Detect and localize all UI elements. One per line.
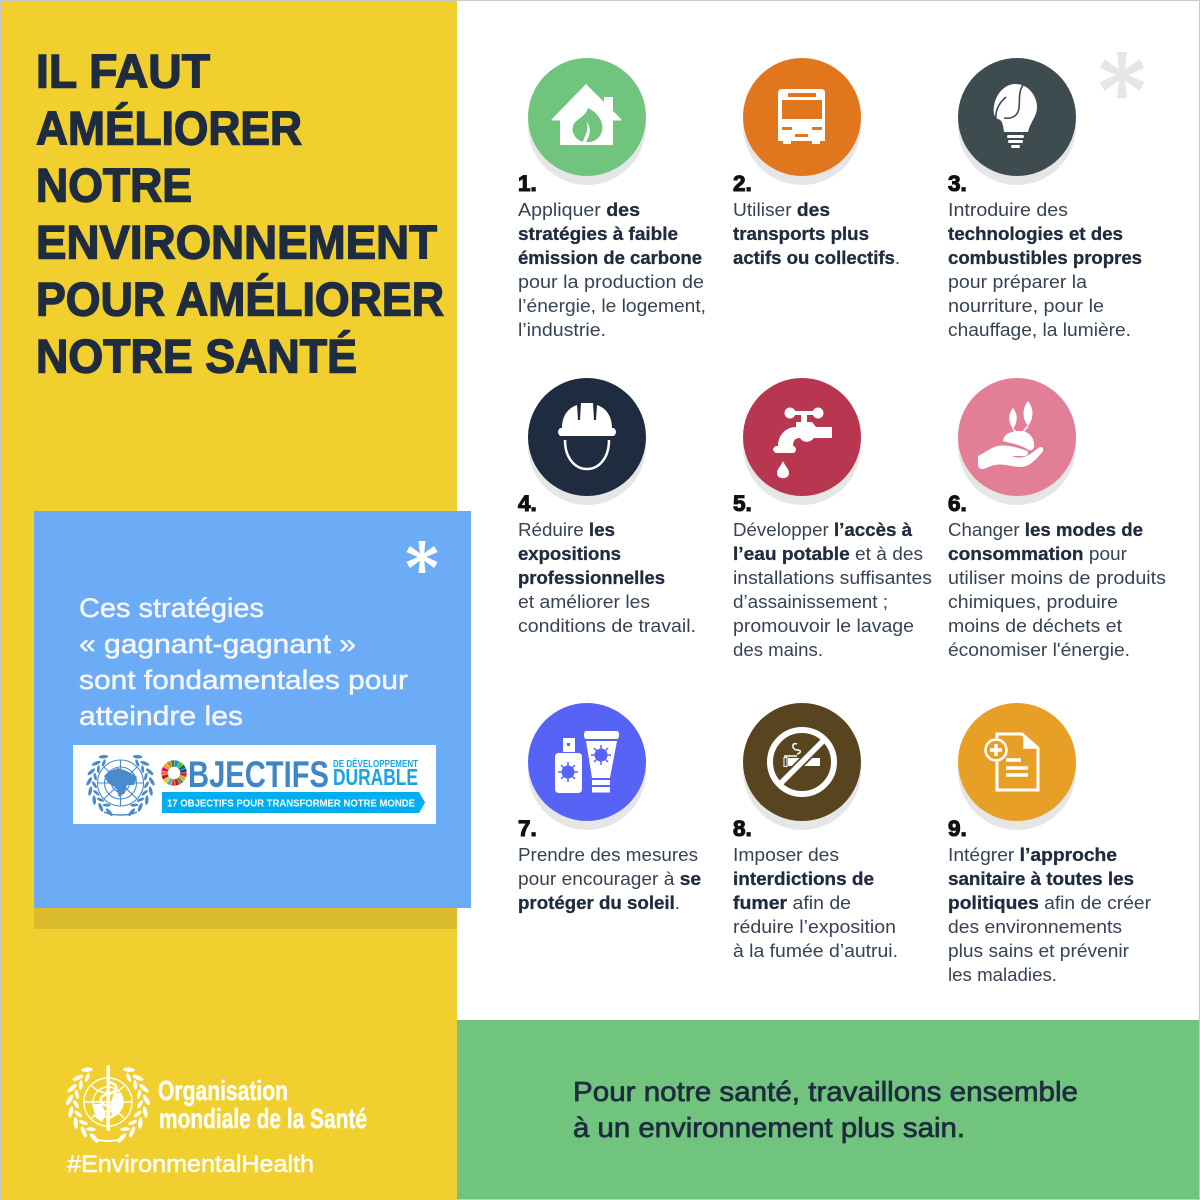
WHO wordmark bbox=[158, 1075, 367, 1134]
item 3 bbox=[948, 58, 1142, 340]
text: item 6: utiliser moins de produits bbox=[948, 567, 1166, 588]
icon: water tap bbox=[743, 378, 861, 505]
logo: sustainable development goals banner bbox=[73, 745, 436, 824]
text: item 4: expositions bbox=[518, 543, 621, 564]
text: item 3 bbox=[948, 199, 1142, 340]
title: AMÉLIORER bbox=[36, 102, 302, 154]
text: item 9: des environnements bbox=[948, 916, 1122, 937]
text: item 1: pour la production de bbox=[518, 271, 704, 292]
callout text bbox=[79, 593, 408, 731]
icon: bus bbox=[743, 58, 861, 185]
text: item 7: Prendre des mesures bbox=[518, 844, 698, 865]
logo wordmark: DURABLE bbox=[333, 764, 418, 790]
icon: SDG colour wheel bbox=[164, 764, 184, 782]
text: item 9: les maladies. bbox=[948, 964, 1057, 985]
item 3: 3. bbox=[948, 171, 967, 196]
text: item 5: Développer l’accès à bbox=[733, 519, 913, 540]
item 9: 9. bbox=[948, 816, 967, 841]
text: item 5: d’assainissement ; bbox=[733, 591, 888, 612]
text: item 6: consommation pour bbox=[948, 543, 1127, 564]
text: item 5 bbox=[733, 519, 932, 660]
text: item 6: chimiques, produire bbox=[948, 591, 1118, 612]
text: item 2: transports plus bbox=[733, 223, 869, 244]
title: IL FAUT bbox=[36, 44, 210, 98]
text: item 1: l’industrie. bbox=[518, 319, 606, 340]
text: item 1: l’énergie, le logement, bbox=[518, 295, 706, 316]
text: item 6: moins de déchets et bbox=[948, 615, 1122, 636]
text: item 2: Utiliser des bbox=[733, 199, 830, 220]
callout text: « gagnant-gagnant » bbox=[79, 629, 356, 659]
logo wordmark: BJECTIFS bbox=[188, 754, 329, 795]
text: item 9 bbox=[948, 844, 1151, 985]
text: item 8: interdictions de bbox=[733, 868, 874, 889]
text: item 4: et améliorer les bbox=[518, 591, 650, 612]
text: item 6: économiser l'énergie. bbox=[948, 639, 1130, 660]
icon: white asterisk bbox=[406, 541, 438, 573]
text: item 9: sanitaire à toutes les bbox=[948, 868, 1134, 889]
text: item 1 bbox=[518, 199, 706, 340]
text: item 5: des mains. bbox=[733, 639, 823, 660]
text: item 9: politiques afin de créer bbox=[948, 892, 1151, 913]
icon: hand holding sprout bbox=[958, 378, 1076, 505]
text: item 1: stratégies à faible bbox=[518, 223, 678, 244]
text: item 5: l’eau potable et à des bbox=[733, 543, 923, 564]
callout text: atteindre les bbox=[79, 701, 243, 731]
title: ENVIRONNEMENT bbox=[36, 216, 437, 268]
footer message bbox=[573, 1076, 1078, 1143]
title: NOTRE bbox=[36, 158, 192, 212]
item 9 bbox=[948, 703, 1151, 985]
hashtag: #EnvironmentalHealth bbox=[67, 1151, 314, 1178]
item 5 bbox=[733, 378, 932, 660]
WHO wordmark: mondiale de la Santé bbox=[159, 1103, 367, 1134]
callout text: sont fondamentales pour bbox=[79, 665, 408, 695]
WHO wordmark: Organisation bbox=[158, 1075, 288, 1106]
icon: grey asterisk bbox=[1100, 52, 1144, 98]
text: item 1: émission de carbone bbox=[518, 247, 702, 268]
callout text: Ces stratégies bbox=[79, 593, 264, 623]
text: item 6 bbox=[948, 519, 1166, 660]
item 6 bbox=[948, 378, 1166, 660]
logo wordmark: DE DÉVELOPPEMENT bbox=[333, 757, 418, 770]
text: item 5: installations suffisantes bbox=[733, 567, 932, 588]
text: item 7 bbox=[518, 844, 701, 913]
text: item 8: à la fumée d’autrui. bbox=[733, 940, 898, 961]
text: item 2: actifs ou collectifs. bbox=[733, 247, 900, 268]
text: item 8: réduire l’exposition bbox=[733, 916, 896, 937]
item 4 bbox=[518, 378, 696, 636]
text: item 3: technologies et des bbox=[948, 223, 1123, 244]
icon: sunscreen bottles bbox=[528, 703, 646, 830]
item 7 bbox=[518, 703, 701, 913]
icon: leaf light bulb bbox=[958, 58, 1076, 185]
item 1 bbox=[518, 58, 706, 340]
text: item 3: chauffage, la lumière. bbox=[948, 319, 1131, 340]
text: item 3: combustibles propres bbox=[948, 247, 1142, 268]
text: item 9: plus sains et prévenir bbox=[948, 940, 1129, 961]
panel: yellow left column bbox=[0, 0, 457, 1200]
item 1: 1. bbox=[518, 171, 537, 196]
title bbox=[36, 44, 444, 382]
icon: medical document bbox=[958, 703, 1076, 830]
item 2 bbox=[733, 58, 900, 268]
item 8: 8. bbox=[733, 816, 752, 841]
logo ribbon: 17 OBJECTIFS POUR TRANSFORMER NOTRE MONDE bbox=[167, 798, 415, 810]
text: item 8: fumer afin de bbox=[733, 892, 851, 913]
logo: WHO emblem bbox=[65, 1065, 151, 1144]
text: item 4: Réduire les bbox=[518, 519, 615, 540]
text: item 8 bbox=[733, 844, 898, 961]
icon: UN emblem bbox=[85, 755, 156, 817]
item 4: 4. bbox=[518, 491, 537, 516]
text: item 3: pour préparer la bbox=[948, 271, 1088, 292]
item 8 bbox=[733, 703, 898, 961]
footer message: Pour notre santé, travaillons ensemble bbox=[573, 1076, 1078, 1107]
footer message: à un environnement plus sain. bbox=[573, 1112, 965, 1143]
text: item 6: Changer les modes de bbox=[948, 519, 1143, 540]
text: item 5: promouvoir le lavage bbox=[733, 615, 914, 636]
icon: house with leaf bbox=[528, 58, 646, 185]
text: item 4: professionnelles bbox=[518, 567, 665, 588]
text: item 2 bbox=[733, 199, 900, 268]
icon: no smoking bbox=[743, 703, 861, 830]
text: item 3: Introduire des bbox=[948, 199, 1068, 220]
panel: blue callout bbox=[34, 511, 471, 929]
item 5: 5. bbox=[733, 491, 752, 516]
text: item 4: conditions de travail. bbox=[518, 615, 696, 636]
text: item 3: nourriture, pour le bbox=[948, 295, 1104, 316]
text: item 4 bbox=[518, 519, 696, 636]
panel: green footer band bbox=[457, 1020, 1200, 1200]
text: item 7: protéger du soleil. bbox=[518, 892, 680, 913]
item 2: 2. bbox=[733, 171, 752, 196]
title: POUR AMÉLIORER bbox=[36, 272, 444, 326]
item 7: 7. bbox=[518, 816, 537, 841]
icon: hard hat bbox=[528, 378, 646, 505]
text: item 8: Imposer des bbox=[733, 844, 839, 865]
title: NOTRE SANTÉ bbox=[36, 330, 357, 382]
logo ribbon bbox=[162, 792, 425, 813]
text: item 7: pour encourager à se bbox=[518, 868, 701, 889]
text: item 1: Appliquer des bbox=[518, 199, 640, 220]
item 6: 6. bbox=[948, 491, 967, 516]
text: item 9: Intégrer l’approche bbox=[948, 844, 1117, 865]
